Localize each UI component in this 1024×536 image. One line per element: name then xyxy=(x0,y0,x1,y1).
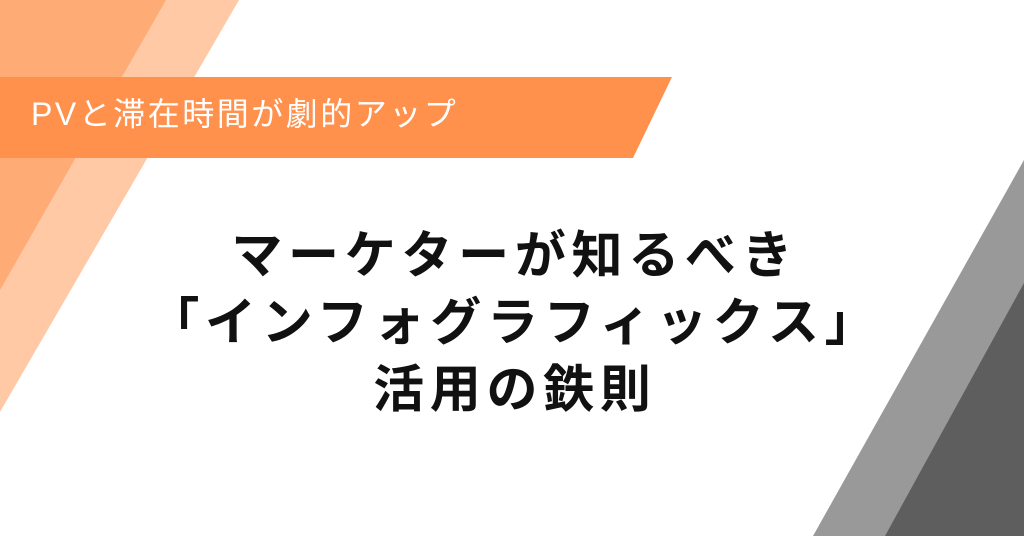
banner text: PVと滞在時間が劇的アップ xyxy=(31,96,458,132)
title xyxy=(148,227,881,418)
title: マーケターが知るべき xyxy=(231,227,798,284)
banner xyxy=(0,77,672,158)
title: 「インフォグラフィックス」 xyxy=(148,294,881,351)
title: 活用の鉄則 xyxy=(373,361,657,418)
